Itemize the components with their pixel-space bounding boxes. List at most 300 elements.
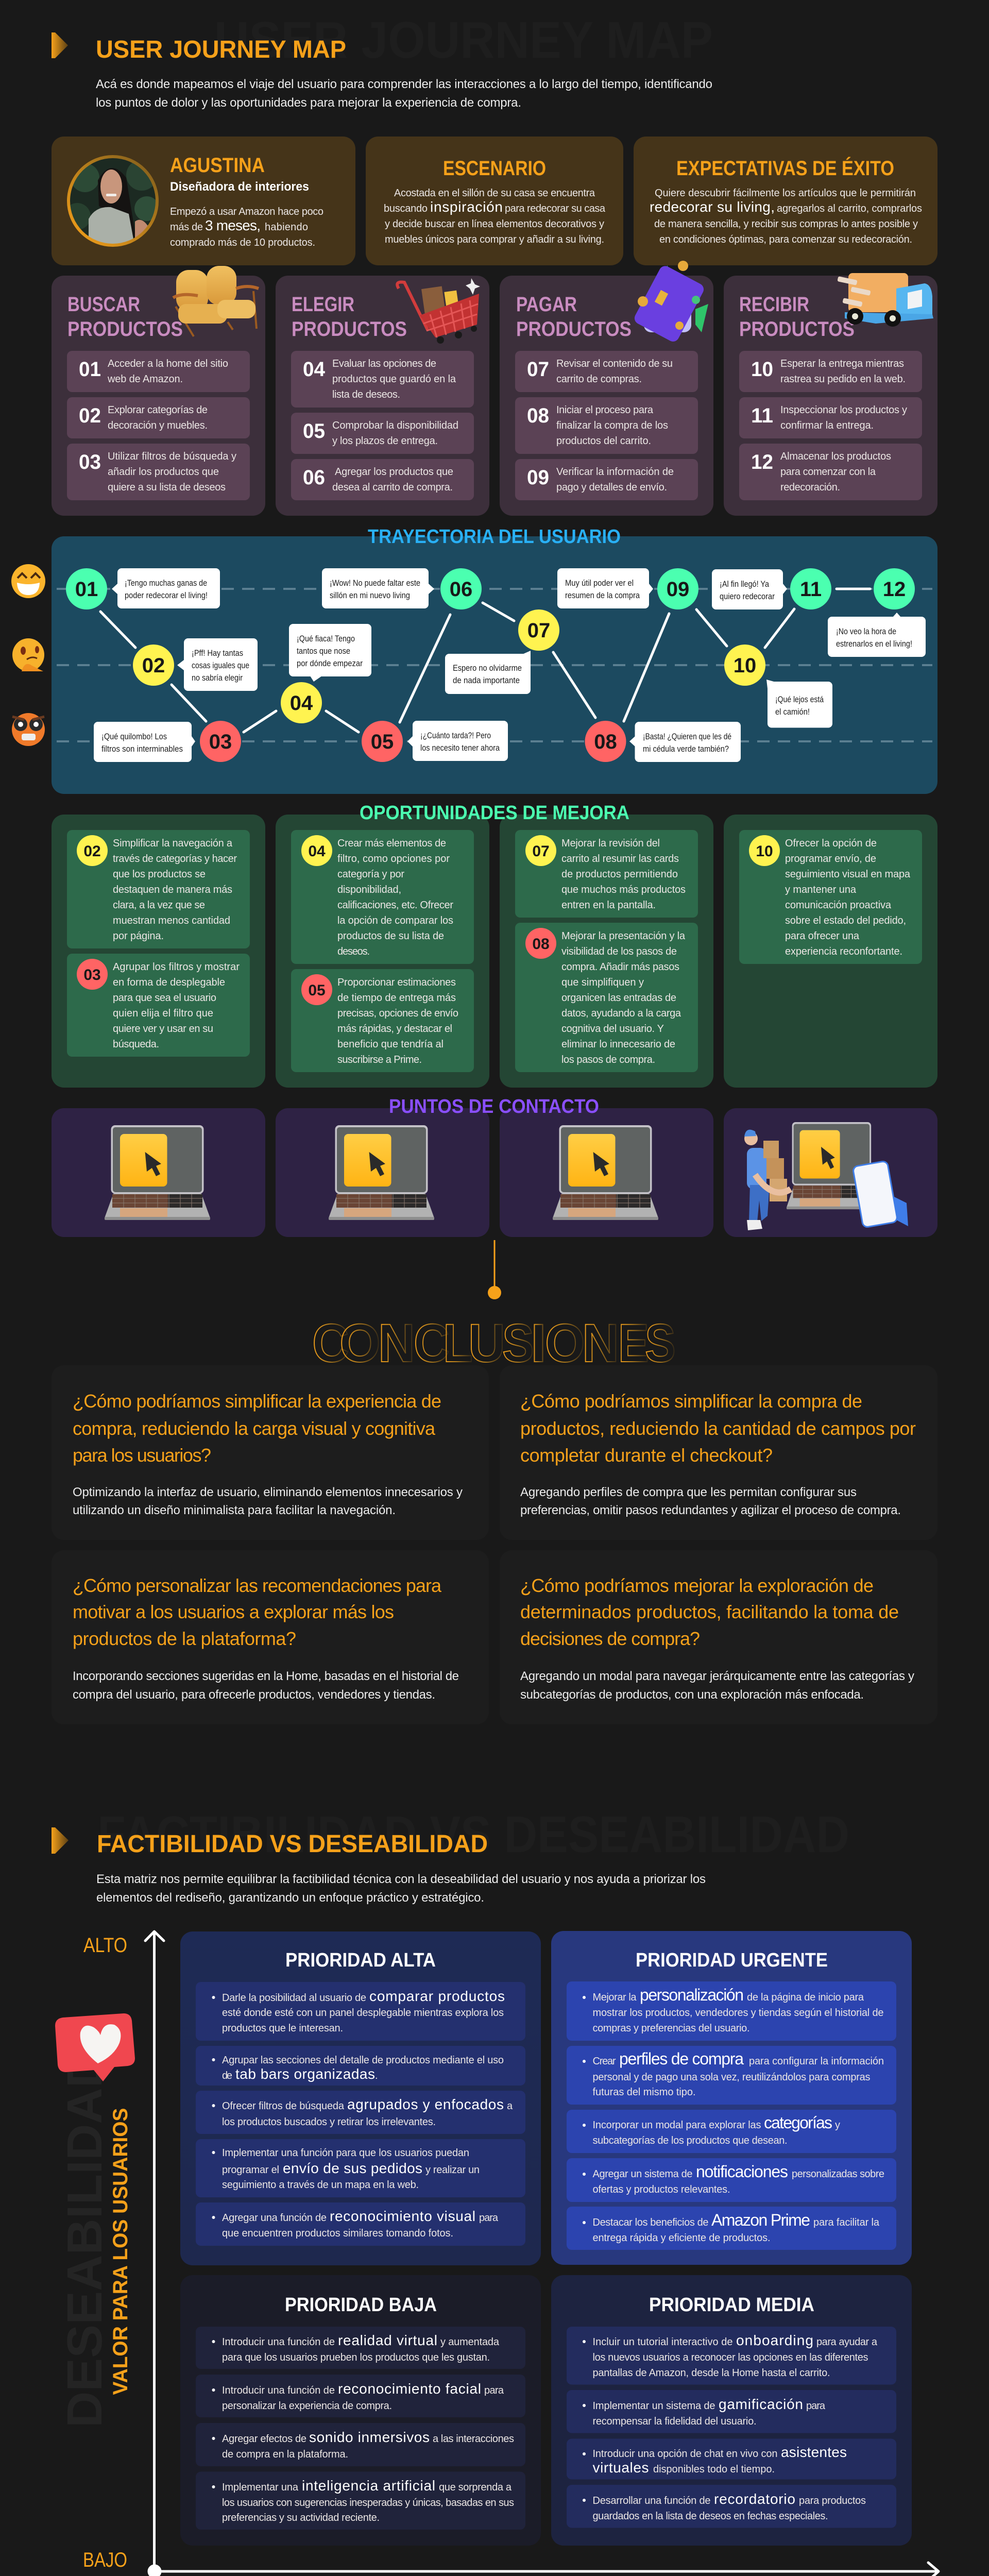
step 06: desea al carrito de compra. bbox=[332, 482, 453, 493]
item: programar el bbox=[222, 2164, 279, 2176]
opportunity 05: más rápidas, y destacar el bbox=[337, 1023, 452, 1035]
step 05: 05 bbox=[303, 420, 325, 443]
step 10: Esperar la entrega mientras bbox=[780, 358, 904, 369]
item: que sorprenda a bbox=[439, 2482, 512, 2493]
intro text: Acá es donde mapeamos el viaje del usuario para comprender las interacciones a lo largo del tiempo, identificando bbox=[96, 77, 712, 91]
item: Mejorar la bbox=[592, 1992, 637, 2003]
opportunity 10: sobre el estado del pedido, bbox=[785, 915, 906, 926]
heading: conclusiones: O bbox=[545, 1313, 585, 1374]
opportunity 08: que simplifiquen y bbox=[561, 977, 644, 988]
item: sonido inmersivos bbox=[309, 2429, 430, 2445]
node 03 bbox=[200, 721, 241, 762]
opportunity 04: 04 bbox=[308, 843, 326, 860]
item: Agregar un sistema de bbox=[592, 2168, 692, 2180]
opportunity 02: por página. bbox=[113, 930, 164, 942]
panel: conclusion 3: compra del usuario, para ofrecerle productos, vendedores y tiendas. bbox=[73, 1688, 435, 1702]
item: notificaciones bbox=[696, 2162, 788, 2181]
item: guardados en la lista de deseos en fechas especiales. bbox=[592, 2511, 828, 2522]
node 05 bbox=[362, 721, 403, 762]
item bbox=[196, 2091, 525, 2134]
step 02: 02 bbox=[79, 404, 101, 427]
panel: conclusion 1: utilizando un diseño minimalista para facilitar la navegación. bbox=[73, 1503, 396, 1517]
callout 04 bbox=[289, 624, 371, 682]
panel: elegir productos: PRODUCTOS bbox=[292, 318, 407, 341]
heading: factibilidad vs deseabilidad: FACTIBILIDAD VS DESEABILIDAD bbox=[97, 1831, 488, 1858]
icon: delivery truck bbox=[837, 273, 933, 327]
panel: recibir productos bbox=[724, 273, 937, 516]
callout 01 bbox=[112, 568, 220, 608]
node 05: 05 bbox=[371, 731, 394, 753]
node 10 bbox=[724, 645, 765, 686]
heading: conclusiones: C bbox=[312, 1313, 349, 1374]
heading: puntos de contacto: PUNTOS DE CONTACTO bbox=[389, 1096, 599, 1117]
opportunity 04: la opción de comparar los bbox=[337, 915, 453, 926]
item: virtuales bbox=[592, 2460, 649, 2476]
callout 10: ¡Qué lejos está bbox=[775, 694, 824, 704]
opportunity 07: de productos permitiendo bbox=[561, 869, 678, 880]
step 07 bbox=[515, 351, 698, 392]
item: Amazon Prime bbox=[711, 2211, 810, 2229]
item: Incluir un tutorial interactivo de bbox=[592, 2336, 732, 2348]
step 02: decoración y muebles. bbox=[108, 420, 208, 431]
icon: happy emoji bbox=[11, 564, 45, 598]
step 11: Inspeccionar los productos y bbox=[780, 404, 907, 416]
opportunity 10 bbox=[739, 830, 922, 964]
item: Agrupar las secciones del detalle de productos mediante el uso bbox=[222, 2055, 504, 2066]
panel: conclusion 4: subcategorías de productos, con una exploración más enfocada. bbox=[520, 1688, 864, 1702]
item: recompensar la fidelidad del usuario. bbox=[592, 2416, 756, 2427]
heading: conclusiones: N bbox=[582, 1313, 619, 1374]
callout 04: ¡Qué fiaca! Tengo bbox=[297, 634, 355, 643]
item: compras y preferencias del usuario. bbox=[592, 2023, 750, 2034]
panel: pagar productos: PRODUCTOS bbox=[516, 318, 632, 341]
opportunity 08: eliminar lo innecesario de bbox=[561, 1039, 675, 1050]
opportunity 03: quien elija el filtro que bbox=[113, 1008, 213, 1019]
opportunity 07: Mejorar la revisión del bbox=[561, 838, 660, 849]
node 01 bbox=[66, 568, 107, 609]
opportunity 08: visibilidad de los pasos de bbox=[561, 946, 677, 957]
item: productos que le interesan. bbox=[222, 2023, 343, 2034]
node 12 bbox=[874, 568, 915, 609]
panel: conclusion 2: productos, reduciendo la cantidad de campos por bbox=[520, 1418, 916, 1439]
node 09: 09 bbox=[667, 578, 689, 601]
step 07: 07 bbox=[527, 358, 549, 381]
opportunity 04: filtro, como opciones por bbox=[337, 853, 450, 865]
step 05 bbox=[291, 413, 474, 454]
heading: oportunidades: OPORTUNIDADES DE MEJORA bbox=[360, 802, 629, 824]
panel: conclusion 1: ¿Cómo podríamos simplificar la experiencia de bbox=[73, 1391, 441, 1412]
step 07: Revisar el contenido de su bbox=[556, 358, 673, 369]
item bbox=[196, 2139, 525, 2197]
panel: escenario: y decide buscar en línea elementos decorativos y bbox=[385, 218, 604, 230]
node 11: 11 bbox=[800, 578, 822, 601]
opportunity 05: 05 bbox=[308, 982, 326, 999]
opportunity 04 bbox=[291, 830, 474, 964]
item: Agregar efectos de bbox=[222, 2433, 306, 2445]
heading: conclusiones: S bbox=[502, 1313, 534, 1374]
callout 12: estrenarlos en el living! bbox=[836, 639, 912, 649]
panel: oportunidades de mejora bbox=[52, 802, 937, 1088]
icon: thinking emoji bbox=[12, 638, 44, 671]
opportunity 10: y mantener una bbox=[785, 884, 857, 895]
item: onboarding bbox=[736, 2332, 813, 2348]
panel: prioridad baja bbox=[180, 2275, 541, 2546]
item: los usuarios con sugerencias inesperadas y únicas, basadas en sus bbox=[222, 2497, 514, 2509]
step 02 bbox=[67, 397, 250, 438]
item: para productos bbox=[799, 2495, 866, 2506]
node 02: 02 bbox=[142, 654, 165, 677]
opportunity 04: deseos. bbox=[337, 946, 370, 957]
heading: trayectoria: TRAYECTORIA DEL USUARIO bbox=[368, 526, 621, 548]
opportunity 07: carrito al resumir las cards bbox=[561, 853, 679, 865]
step 03: 03 bbox=[79, 451, 101, 473]
item: envío de sus pedidos bbox=[283, 2160, 422, 2176]
item bbox=[196, 2327, 525, 2369]
step 12: Almacenar los productos bbox=[780, 451, 891, 462]
opportunity 10: experiencia reconfortante. bbox=[785, 946, 902, 957]
panel: conclusion 4 bbox=[500, 1550, 937, 1724]
panel: persona Agustina: Empezó a usar Amazon hace poco bbox=[170, 206, 323, 217]
callout 11: quiero redecorar bbox=[720, 591, 775, 601]
step 05: Comprobar la disponibilidad bbox=[332, 420, 458, 431]
heading: conclusiones: O bbox=[339, 1313, 381, 1374]
step 03: Utilizar filtros de búsqueda y bbox=[108, 451, 236, 462]
node 04 bbox=[281, 682, 322, 723]
step 03: añadir los productos que bbox=[108, 466, 219, 478]
opportunity 04: categoría y por bbox=[337, 869, 404, 880]
opportunity 07: entren en la pantalla. bbox=[561, 900, 656, 911]
item bbox=[567, 2439, 896, 2479]
step 12 bbox=[739, 444, 922, 500]
node 06 bbox=[440, 568, 482, 609]
node 09 bbox=[657, 568, 698, 609]
journey line bbox=[100, 589, 870, 732]
step 12: para comenzar con la bbox=[780, 466, 876, 478]
panel: expectativas de éxito: EXPECTATIVAS DE ÉXITO bbox=[676, 157, 894, 180]
item: inteligencia artificial bbox=[302, 2478, 435, 2494]
icon: laptop with delivery person and phone bbox=[744, 1122, 908, 1230]
heading: conclusiones: N bbox=[378, 1313, 415, 1374]
panel: conclusion 3: Incorporando secciones sugeridas en la Home, basadas en el historial de bbox=[73, 1669, 459, 1683]
icon: credit card bbox=[633, 261, 708, 344]
callout 06: sillón en mi nuevo living bbox=[330, 590, 410, 600]
panel: conclusion 4: determinados productos, facilitando la toma de bbox=[520, 1601, 899, 1622]
step 11: confirmar la entrega. bbox=[780, 420, 874, 431]
callout 09 bbox=[557, 568, 653, 608]
intro text: matriz: Esta matriz nos permite equilibrar la factibilidad técnica con la deseabilidad del usuario y nos ayuda a priorizar los bbox=[96, 1872, 706, 1886]
item: perfiles de compra bbox=[619, 2049, 744, 2068]
callout 01: poder redecorar el living! bbox=[125, 590, 208, 600]
opportunity 02: destaquen de manera más bbox=[113, 884, 232, 895]
item: esté donde esté con un panel desplegable mientras explora los bbox=[222, 2007, 504, 2019]
opportunity 05: precisas, opciones de envío bbox=[337, 1008, 458, 1019]
panel: elegir productos: ELEGIR bbox=[292, 293, 354, 316]
opportunity 05: beneficio que tendría al bbox=[337, 1039, 444, 1050]
callout 04: tantos que nose bbox=[297, 646, 350, 656]
item: para facilitar la bbox=[813, 2217, 880, 2228]
item: para configurar la información bbox=[749, 2056, 884, 2067]
panel: pagar productos bbox=[500, 261, 713, 516]
callout 05: ¡¿Cuánto tarda?! Pero bbox=[420, 731, 491, 740]
panel: prioridad alta: PRIORIDAD ALTA bbox=[285, 1950, 436, 1971]
opportunity 10: comunicación proactiva bbox=[785, 900, 892, 911]
item: los nuevos usuarios a reconocer las opciones en las diferentes bbox=[592, 2352, 868, 2363]
opportunity 08: datos, ayudando a la carga bbox=[561, 1008, 681, 1019]
item: Implementar un sistema de bbox=[592, 2400, 715, 2412]
item: seguimiento a través de un mapa en la web. bbox=[222, 2179, 419, 2191]
item bbox=[567, 2390, 896, 2433]
heading: user journey map: USER JOURNEY MAP bbox=[214, 11, 713, 69]
icon: laptop 1 bbox=[105, 1125, 210, 1220]
heading: conclusiones: L bbox=[443, 1313, 473, 1374]
opportunity 10: para ofrecer una bbox=[785, 930, 860, 942]
item bbox=[196, 2423, 525, 2466]
icon: laptop 3 bbox=[553, 1125, 658, 1220]
node 01: 01 bbox=[75, 578, 98, 601]
panel: escenario: inspiración bbox=[430, 199, 503, 215]
item bbox=[196, 2472, 525, 2530]
panel: buscar productos bbox=[52, 266, 265, 516]
panel: expectativas de éxito bbox=[634, 137, 937, 265]
item: personalización bbox=[640, 1986, 744, 2004]
step 01: Acceder a la home del sitio bbox=[108, 358, 228, 369]
opportunity 10: 10 bbox=[756, 843, 773, 860]
step 08: Iniciar el proceso para bbox=[556, 404, 654, 416]
item: mostrar los productos, vendedores y tiendas según el historial de bbox=[592, 2007, 884, 2019]
heading: conclusiones bbox=[312, 1313, 676, 1374]
panel: conclusion 2: ¿Cómo podríamos simplificar la compra de bbox=[520, 1391, 862, 1412]
item: agrupados y enfocados bbox=[347, 2096, 504, 2112]
step 04: lista de deseos. bbox=[332, 389, 400, 400]
item bbox=[567, 2110, 896, 2153]
item: Introducir una función de bbox=[222, 2336, 335, 2348]
heading: user journey map: USER JOURNEY MAP bbox=[96, 36, 346, 63]
opportunity 04: disponibilidad, bbox=[337, 884, 401, 895]
opportunity 10: programar envío, de bbox=[785, 853, 876, 865]
item: para ayudar a bbox=[816, 2336, 878, 2348]
opportunity 03: búsqueda. bbox=[113, 1039, 159, 1050]
item bbox=[196, 2202, 525, 2246]
callout 04: por dónde empezar bbox=[297, 658, 363, 668]
item: preferencias y su actividad reciente. bbox=[222, 2512, 380, 2523]
step 01: 01 bbox=[79, 358, 101, 381]
panel: expectativas de éxito: de manera sencilla, y recibir sus compras lo antes posible y bbox=[654, 218, 918, 230]
panel: expectativas de éxito: agregarlos al carrito, comprarlos bbox=[777, 203, 922, 214]
step 12: redecoración. bbox=[780, 482, 840, 493]
opportunity 07: que muchos más productos bbox=[561, 884, 686, 895]
panel: prioridad media bbox=[551, 2275, 912, 2546]
opportunity 03 bbox=[67, 954, 250, 1057]
callout 07: de nada importante bbox=[453, 675, 520, 685]
panel: persona Agustina bbox=[52, 137, 355, 265]
node 07 bbox=[518, 609, 559, 651]
panel: persona Agustina: Diseñadora de interiores bbox=[170, 180, 309, 194]
ghost label: deseabilidad: DESEABILIDAD bbox=[57, 2052, 112, 2428]
chart: priority matrix axes bbox=[145, 1931, 939, 2576]
heading: conclusiones: E bbox=[618, 1313, 649, 1374]
opportunity 08: los pasos de compra. bbox=[561, 1054, 655, 1065]
item: para bbox=[479, 2212, 499, 2224]
item: Incorporar un modal para explorar las bbox=[592, 2120, 761, 2131]
node 02 bbox=[133, 645, 174, 686]
panel: pagar productos: PAGAR bbox=[516, 293, 577, 316]
panel: persona Agustina: 3 meses, bbox=[205, 217, 261, 233]
panel: persona Agustina: comprado más de 10 productos. bbox=[170, 237, 315, 248]
step 07: carrito de compras. bbox=[556, 374, 642, 385]
step 09: Verificar la información de bbox=[556, 466, 674, 478]
item: Desarrollar una función de bbox=[592, 2495, 711, 2506]
opportunity 03: Agrupar los filtros y mostrar bbox=[113, 961, 240, 973]
intro text: matriz bbox=[96, 1872, 706, 1905]
callout 07 bbox=[445, 651, 531, 694]
step 08 bbox=[515, 397, 698, 454]
panel: buscar productos: PRODUCTOS bbox=[67, 318, 183, 341]
item: personalizar la experiencia de compra. bbox=[222, 2400, 392, 2412]
item: pantallas de Amazon, desde la Home hasta el carrito. bbox=[592, 2367, 830, 2379]
heading: factibilidad vs deseabilidad: FACTIBILIDAD VS DESEABILIDAD bbox=[97, 1806, 849, 1863]
step 10: 10 bbox=[751, 358, 773, 381]
item: para que los usuarios prueben los productos que les gustan. bbox=[222, 2352, 490, 2363]
opportunity 08: cognitiva del usuario. Y bbox=[561, 1023, 664, 1035]
callout 06: ¡Wow! No puede faltar este bbox=[330, 578, 420, 588]
item bbox=[567, 2327, 896, 2384]
panel: conclusion 2: preferencias, omitir pasos redundantes y agilizar el proceso de compra. bbox=[520, 1503, 901, 1517]
panel: expectativas de éxito: en condiciones óptimas, para comenzar su redecoración. bbox=[659, 234, 912, 245]
avatar photo bbox=[64, 155, 160, 247]
callout 03: filtros son interminables bbox=[101, 744, 183, 754]
panel: persona Agustina: AGUSTINA bbox=[170, 154, 265, 177]
opportunity 02: que los productos se bbox=[113, 869, 206, 880]
step 09: pago y detalles de envío. bbox=[556, 482, 667, 493]
item: y bbox=[835, 2120, 840, 2131]
icon: angry emoji bbox=[12, 713, 45, 746]
opportunity 02: muestran menos cantidad bbox=[113, 915, 230, 926]
item: asistentes bbox=[781, 2444, 847, 2460]
step 05: y los plazos de entrega. bbox=[332, 435, 438, 447]
item: para bbox=[484, 2385, 504, 2396]
panel: escenario: Acostada en el sillón de su casa se encuentra bbox=[394, 188, 595, 199]
panel: conclusion 3 bbox=[52, 1550, 489, 1724]
item: gamificación bbox=[719, 2396, 803, 2412]
node 11 bbox=[790, 568, 831, 609]
opportunity 04: calificaciones, etc. Ofrecer bbox=[337, 900, 453, 911]
opportunity 03: 03 bbox=[83, 967, 101, 984]
item: comparar productos bbox=[369, 1988, 505, 2004]
axis label: valor para los usuarios: VALOR PARA LOS USUARIOS bbox=[109, 2108, 132, 2395]
panel: expectativas de éxito: redecorar su living, bbox=[650, 199, 775, 215]
item: disponibles todo el tiempo. bbox=[653, 2464, 775, 2475]
step 04 bbox=[291, 351, 474, 408]
step 04: 04 bbox=[303, 358, 326, 381]
panel: conclusion 3: productos de la plataforma? bbox=[73, 1628, 296, 1649]
panel: prioridad urgente: PRIORIDAD URGENTE bbox=[636, 1950, 828, 1971]
callout 07: Espero no olvidarme bbox=[453, 663, 522, 673]
item bbox=[567, 2485, 896, 2528]
item: a bbox=[507, 2100, 513, 2112]
step 06: 06 bbox=[303, 466, 325, 489]
opportunity 02: Simplificar la navegación a bbox=[113, 838, 233, 849]
step 11: 11 bbox=[751, 404, 773, 427]
item: a las interacciones bbox=[433, 2433, 514, 2445]
step 08: productos del carrito. bbox=[556, 435, 651, 447]
item: Implementar una función para que los usuarios puedan bbox=[222, 2147, 469, 2159]
intro text bbox=[96, 77, 712, 110]
item: reconocimiento visual bbox=[330, 2208, 475, 2224]
panel: recibir productos: PRODUCTOS bbox=[739, 318, 855, 341]
step 01 bbox=[67, 351, 250, 392]
panel: conclusion 2: completar durante el checkout? bbox=[520, 1445, 773, 1466]
item bbox=[196, 2375, 525, 2417]
step 11 bbox=[739, 397, 922, 438]
item: de bbox=[222, 2070, 232, 2081]
panel: conclusion 1 bbox=[52, 1365, 489, 1540]
item: los productos buscados y retirar los irrelevantes. bbox=[222, 2116, 436, 2128]
panel: conclusion 2: Agregando perfiles de compra que les permitan configurar sus bbox=[520, 1485, 857, 1499]
panel: conclusion 1: Optimizando la interfaz de usuario, eliminando elementos innecesarios y bbox=[73, 1485, 463, 1499]
opportunity 02: clara, a la vez que se bbox=[113, 900, 205, 911]
heading: conclusiones: S bbox=[645, 1313, 676, 1374]
step 09: 09 bbox=[527, 466, 549, 489]
panel: conclusion 3: motivar a los usuarios a explorar más los bbox=[73, 1601, 394, 1622]
opportunity 10: seguimiento visual en mapa bbox=[785, 869, 911, 880]
axis label: bajo y: BAJO bbox=[83, 2549, 127, 2571]
item: de compra en la plataforma. bbox=[222, 2449, 348, 2460]
icon: heart bubble bbox=[55, 2013, 135, 2081]
node 08: 08 bbox=[594, 731, 617, 753]
axis label: alto y: ALTO bbox=[83, 1934, 127, 1957]
intro text: matriz: elementos del rediseño, garantizando un enfoque práctico y estratégico. bbox=[96, 1891, 484, 1905]
panel: prioridad baja: PRIORIDAD BAJA bbox=[285, 2294, 437, 2316]
item bbox=[196, 1982, 525, 2041]
opportunity 03: en forma de desplegable bbox=[113, 977, 225, 988]
panel: conclusion 2 bbox=[500, 1365, 937, 1540]
opportunity 07 bbox=[515, 830, 698, 918]
callout 12: ¡No veo la hora de bbox=[836, 626, 896, 636]
opportunity 10: Ofrecer la opción de bbox=[785, 838, 877, 849]
callout 01: ¡Tengo muchas ganas de bbox=[125, 578, 207, 588]
panel: elegir productos bbox=[276, 276, 489, 516]
item bbox=[567, 2046, 896, 2105]
callout 02: cosas iguales que bbox=[192, 660, 249, 670]
heading: conclusiones: I bbox=[531, 1313, 547, 1374]
item bbox=[567, 1981, 896, 2041]
heading: conclusiones: C bbox=[414, 1313, 450, 1374]
opportunity 08: compra. Añadir más pasos bbox=[561, 961, 679, 973]
step 06: Agregar los productos que bbox=[335, 466, 453, 478]
item: Agregar una función de bbox=[222, 2212, 327, 2224]
opportunity 08: 08 bbox=[532, 936, 550, 953]
item: futuras del mismo tipo. bbox=[592, 2087, 695, 2098]
step 04: productos que guardó en la bbox=[332, 374, 456, 385]
step 04: Evaluar las opciones de bbox=[332, 358, 436, 369]
step 08: 08 bbox=[527, 404, 549, 427]
opportunity 08: organicen las entradas de bbox=[561, 992, 676, 1004]
panel: conclusion 1: para los usuarios? bbox=[73, 1445, 211, 1466]
item: personal y de pago una sola vez, reutilizándolos para compras bbox=[592, 2072, 871, 2083]
item: y realizar un bbox=[425, 2164, 480, 2176]
step 06 bbox=[291, 459, 474, 500]
node 10: 10 bbox=[734, 654, 756, 677]
opportunity 02: 02 bbox=[83, 843, 101, 860]
item: y aumentada bbox=[440, 2336, 500, 2348]
callout 05: los necesito tener ahora bbox=[420, 743, 500, 753]
panel: conclusion 1: compra, reduciendo la carga visual y cognitiva bbox=[73, 1418, 436, 1439]
item: Introducir una función de bbox=[222, 2385, 335, 2396]
item bbox=[567, 2207, 896, 2250]
step 09 bbox=[515, 459, 698, 500]
step 10 bbox=[739, 351, 922, 392]
step 02: Explorar categorías de bbox=[108, 404, 208, 416]
